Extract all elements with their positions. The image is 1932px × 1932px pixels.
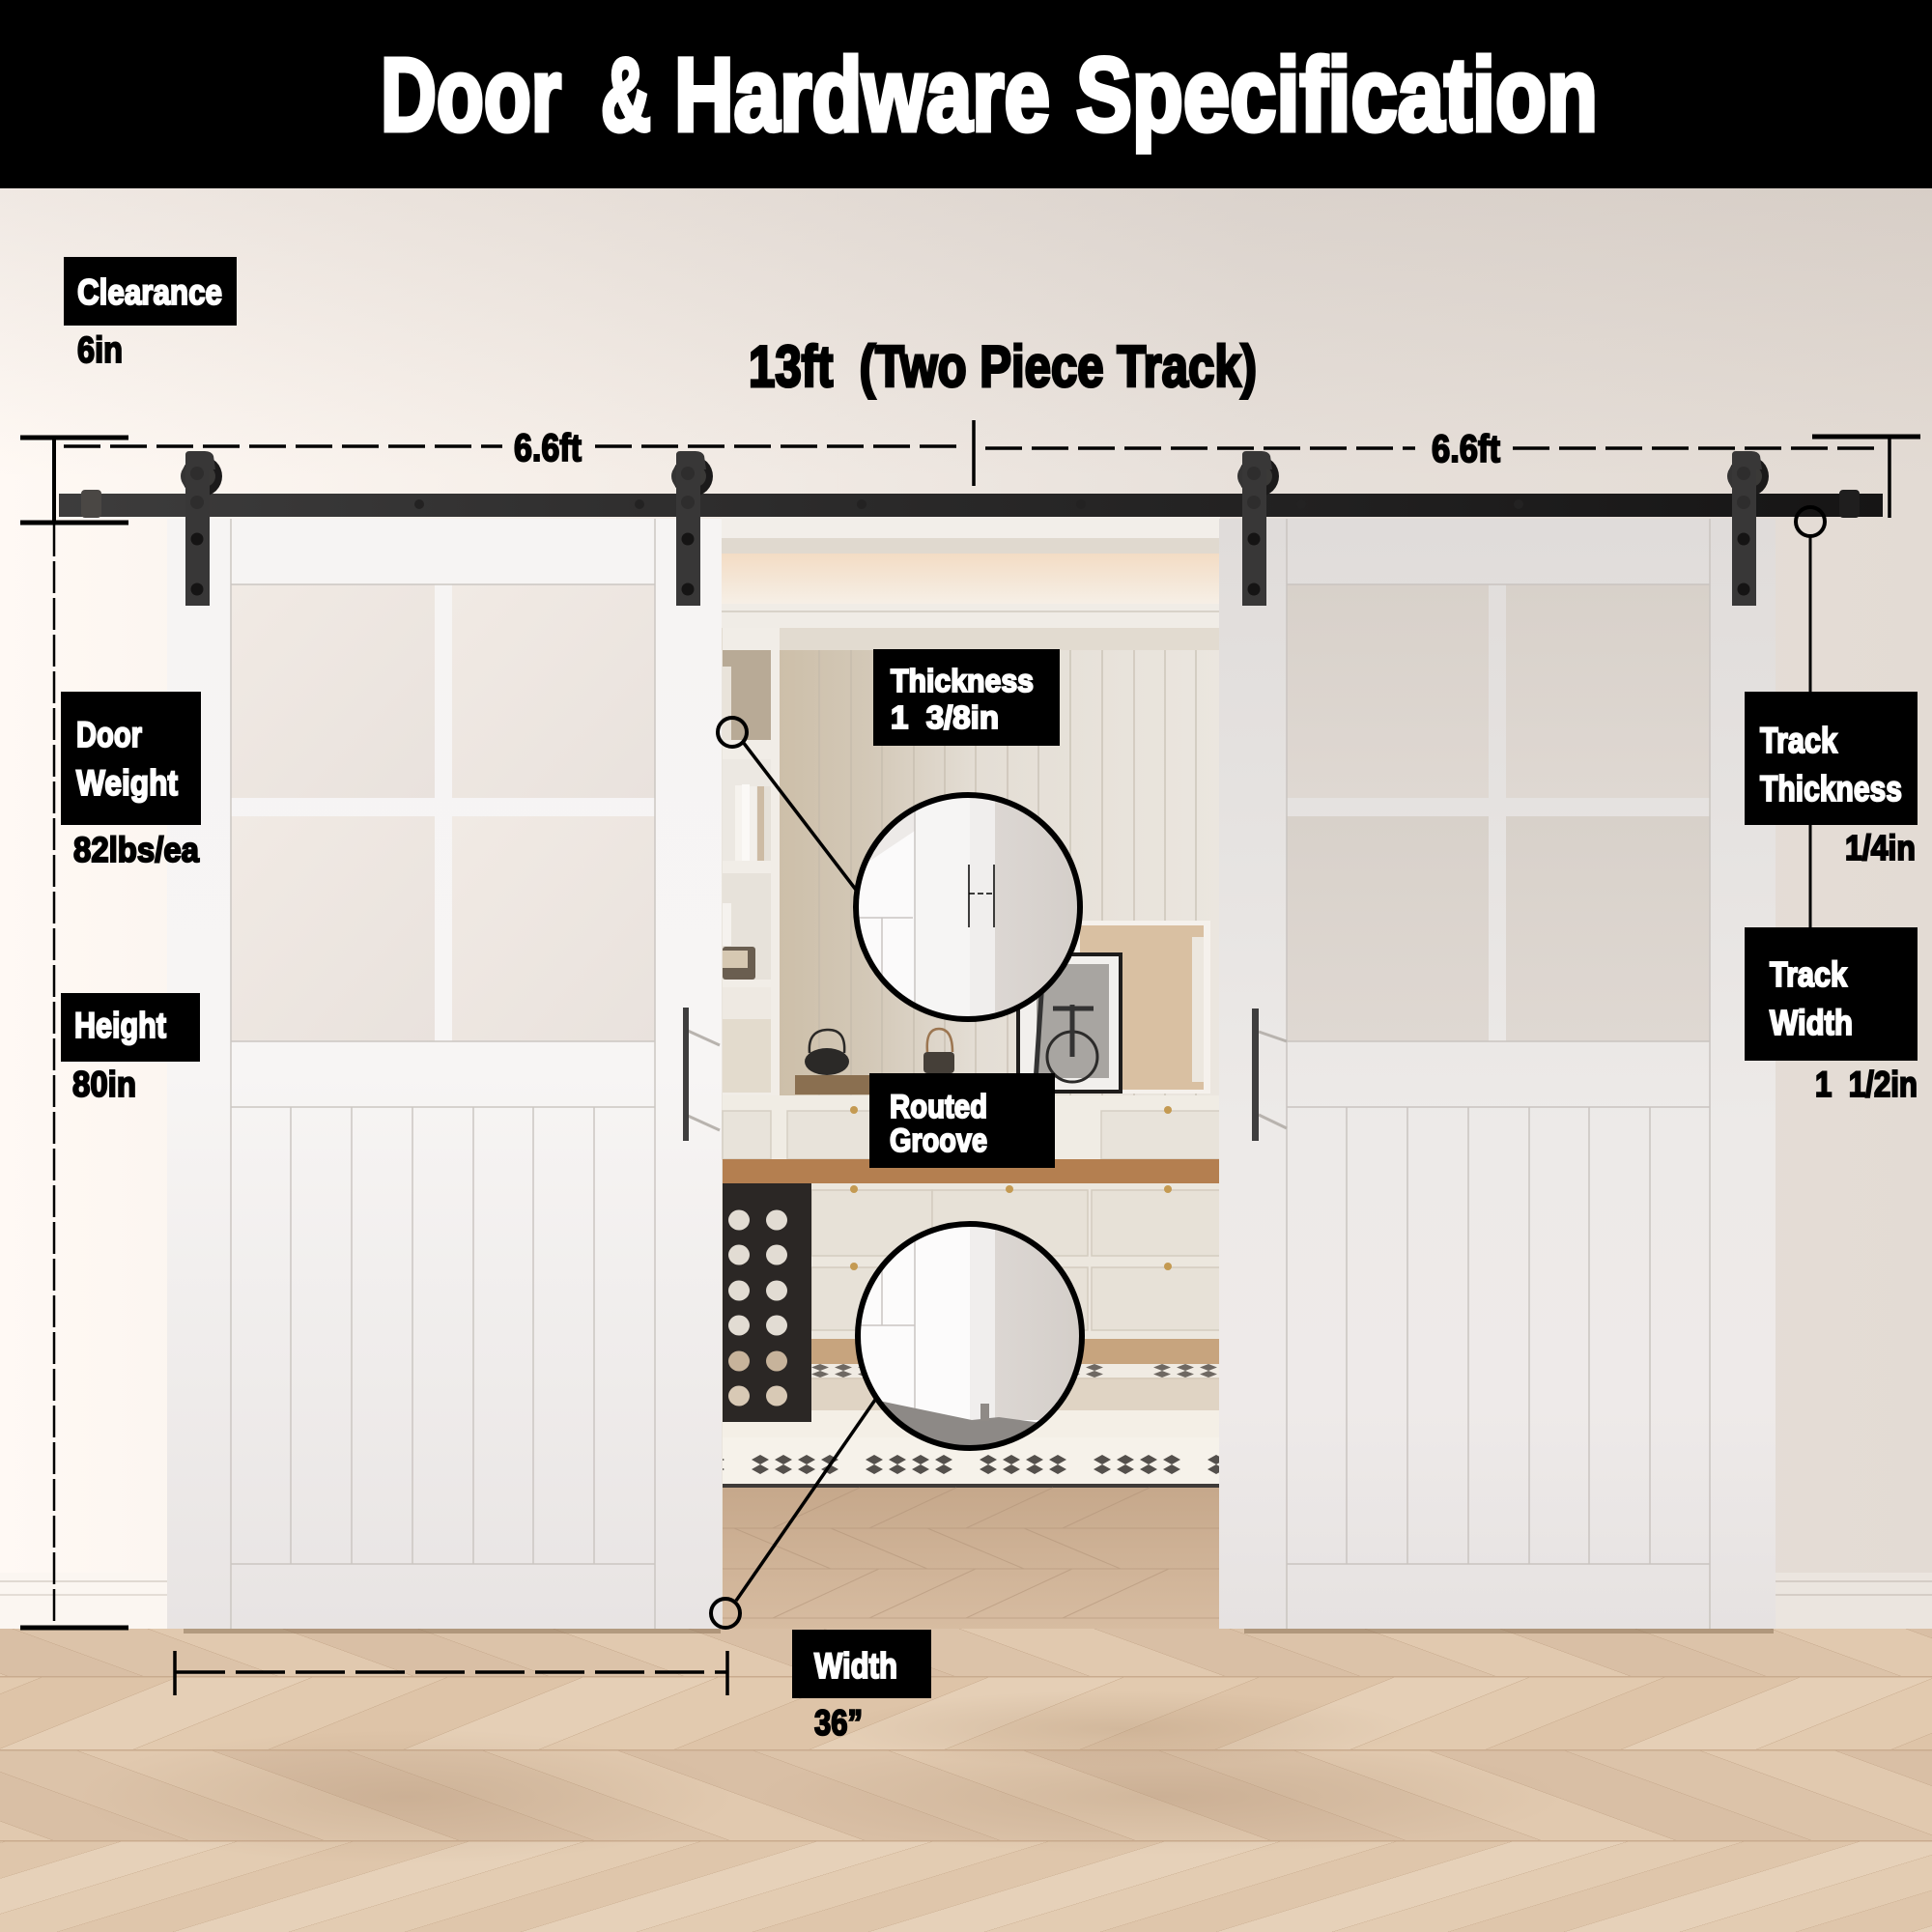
title: & [601,36,651,153]
label: height [61,993,200,1104]
ceiling and warm light [722,517,1220,650]
wall background [0,188,1932,1633]
label: routed groove: Groove [890,1122,987,1159]
title: Specification [1076,36,1598,153]
label: door weight [61,692,201,869]
left height dimension [20,438,128,1628]
label: track width: Width [1770,1003,1853,1042]
header bar [0,0,1932,188]
right barn door [1219,519,1776,1629]
herringbone wood floor [0,1629,1932,1932]
label: routed groove [869,1073,1055,1168]
lower planks [231,519,655,1629]
label: track width [1745,927,1918,1104]
label: track thickness: Thickness [1760,769,1902,809]
wood counter [723,1159,1220,1183]
track dimension dashes [64,446,1884,448]
label: width: 36” [814,1703,863,1743]
right track section length: 6.6ft [1432,428,1500,470]
top glass panes [1287,584,1710,1041]
label: clearance [64,257,237,371]
groove callout ring and line [711,1400,875,1628]
track callout ring and line [1796,507,1825,927]
label: door weight: Weight [76,763,178,803]
label: thickness: Thickness [891,663,1034,698]
label: track thickness: Track [1760,721,1837,760]
bookshelf column [723,628,780,1095]
label: width [792,1630,931,1743]
label: height: Height [74,1006,166,1045]
left track section length: 6.6ft [514,427,582,469]
label: clearance: 6in [77,330,123,371]
magnifier: routed groove [855,1217,1096,1459]
label: door weight: 82lbs/ea [73,830,200,869]
baseboards [0,1573,1932,1629]
lower cabinets [723,1183,1220,1339]
panelled back wall [780,650,1220,1095]
label: height: 80in [72,1065,136,1104]
label: clearance: Clearance [77,272,222,312]
interior room behind the doors [722,517,1220,1629]
black perforated panel [723,1183,811,1422]
barn door track [59,490,1883,518]
magnifier: door thickness [850,787,1092,1029]
label: track thickness [1745,692,1918,867]
label: track thickness: 1/4in [1845,828,1916,867]
door handles [683,1008,1287,1141]
title: Door [381,36,561,153]
centre tick [972,420,976,486]
rug and interior floor [723,1339,1220,1629]
upper cabinets [723,1095,1220,1159]
label: thickness: 1 3/8in [891,699,999,735]
label: width: Width [814,1646,897,1686]
title: Hardware [674,36,1050,153]
hanger straps [181,451,1769,606]
door bottom shadow [184,1629,1774,1634]
top glass panes [231,584,655,1041]
label: thickness [873,649,1060,746]
right clearance bracket [1812,437,1920,518]
label: door weight: Door [76,715,142,754]
left barn door [167,519,722,1629]
track stoppers [81,490,1860,518]
title [381,36,1598,153]
label: track width: Track [1770,954,1848,994]
label: routed groove: Routed [890,1089,987,1125]
framed pictures [1016,921,1210,1094]
track length heading: 13ft (Two Piece Track) [749,334,1257,399]
door width dimension [175,1651,727,1695]
thickness callout ring and line [718,718,856,890]
lower planks [1287,519,1710,1629]
teapots and tray [795,1029,954,1094]
